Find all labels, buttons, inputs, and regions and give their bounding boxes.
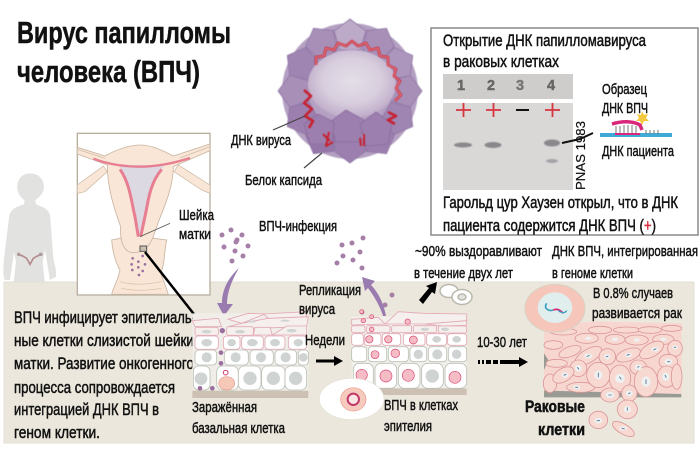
arrow: recovery — [419, 282, 437, 304]
panel: beige background — [4, 282, 694, 443]
label: 90 percent recover: в течение двух лет — [414, 266, 513, 282]
label: years with arrow — [477, 335, 528, 367]
label: cancer cells — [525, 397, 585, 439]
capsomers — [278, 19, 422, 163]
label: years with arrow: 10-30 лет — [477, 335, 527, 351]
label: cervix: матки — [179, 227, 211, 243]
label: infected basal cell: базальная клетка — [192, 421, 286, 437]
chromatin — [564, 347, 676, 429]
label: weeks with arrow: Недели — [305, 333, 345, 349]
labels: sample: Образец — [602, 82, 647, 98]
squamous cells — [352, 312, 467, 345]
label: viral DNA — [231, 116, 305, 149]
label: viral replication: Репликация — [299, 283, 361, 299]
label: 90 percent recover: ~90% выздоравливают — [415, 244, 542, 260]
labels: sample: ДНК ВПЧ — [602, 101, 648, 117]
label: weeks with arrow — [305, 333, 345, 366]
virus particles: replication — [334, 236, 394, 314]
panel: DNA discovery — [431, 28, 698, 235]
label: 90 percent recover — [414, 244, 542, 282]
ligaments — [77, 165, 210, 193]
inner core — [308, 50, 396, 118]
label: cervix — [179, 208, 215, 243]
icon: healthy cells — [440, 284, 472, 304]
label: viral replication: вируса — [299, 302, 336, 318]
panel text: ВПЧ инфицирует эпителиаль- — [14, 308, 196, 327]
cells — [543, 325, 682, 439]
gel image: 1 — [457, 78, 465, 94]
panel text — [14, 308, 196, 442]
label: integrated DNA: в геноме клетки — [552, 266, 633, 282]
heading: в раковых клетках — [443, 52, 559, 71]
arrow: replication — [362, 277, 386, 316]
uterine wall — [93, 158, 190, 167]
heading: Открытие ДНК папилломавируса — [443, 31, 646, 50]
pointer to DNA sample — [562, 133, 593, 143]
viral DNA — [304, 41, 401, 146]
bottom capsomers — [304, 110, 392, 146]
label: 0.8 percent cancer: развивается рак — [592, 306, 683, 322]
virus dots — [130, 255, 146, 276]
label: 0.8 percent cancer: В 0.8% случаев — [593, 286, 673, 302]
panel text: матки. Развитие онкогенного — [14, 354, 194, 373]
icon: female body silhouette — [3, 173, 56, 285]
label: HPV in epithelial cells — [384, 398, 459, 435]
title: человека (ВПЧ) — [17, 54, 200, 89]
panel: uterus diagram — [77, 133, 210, 295]
label: 0.8 percent cancer — [592, 286, 683, 322]
infected nuclei — [356, 310, 461, 383]
gray nuclei — [414, 328, 461, 383]
gel image: 4 — [547, 78, 555, 94]
title — [17, 15, 231, 89]
label: infected basal cell — [192, 400, 286, 437]
infected basal cell — [219, 370, 235, 390]
gel image — [443, 74, 573, 190]
label: HPV in epithelial cells: ВПЧ в клетках — [384, 398, 459, 414]
label: integrated DNA — [552, 244, 698, 282]
gel image: 3 — [516, 78, 524, 94]
arrow: infection — [217, 268, 239, 316]
cell nuclei — [562, 337, 678, 430]
label: viral replication — [299, 283, 361, 318]
tissue: HPV in epithelium — [319, 310, 467, 420]
label: capsid protein — [245, 153, 323, 189]
vertical credit: PNAS 1983 — [573, 121, 588, 190]
uterus body — [77, 144, 210, 253]
virus in tissue — [198, 328, 225, 391]
label: cervix: Шейка — [179, 208, 215, 224]
panel text: ные клетки слизистой шейки — [14, 331, 194, 350]
squamous cells — [192, 312, 308, 335]
label: cancer cells: клетки — [538, 420, 585, 439]
cervix pointer line — [140, 223, 170, 237]
nuclei — [195, 320, 308, 385]
inset: cell with integrated DNA — [525, 284, 585, 332]
label: HPV in epithelial cells: эпителия — [384, 419, 432, 435]
label: capsid protein: Белок капсида — [245, 173, 323, 189]
tissue: infected epithelium — [192, 312, 308, 398]
label: HPV infection: ВПЧ-инфекция — [259, 219, 337, 235]
panel text: интеграцией ДНК ВПЧ в — [14, 400, 159, 419]
uterine cavity — [118, 165, 165, 237]
middle rows — [195, 336, 307, 349]
virus particle — [278, 19, 422, 163]
caption: пациента содержится ДНК ВПЧ (+) — [443, 216, 656, 235]
virus particles: infection — [220, 228, 250, 264]
gel image: 2 — [487, 78, 495, 94]
vagina — [112, 238, 168, 294]
tissue: cancer cells — [543, 322, 682, 439]
heading — [443, 31, 646, 71]
labels: sample — [602, 82, 648, 117]
title: Вирус папилломы — [17, 15, 231, 50]
pointer: cervix to epithelium — [145, 252, 197, 318]
inset: HPV in cell — [319, 378, 384, 420]
label: cancer cells: Раковые — [525, 397, 585, 416]
icon: DNA hybrid — [600, 111, 672, 135]
label: infected basal cell: Заражённая — [192, 400, 257, 416]
panel text: геном клетки. — [14, 423, 100, 442]
label: patient DNA: ДНК пациента — [602, 144, 675, 160]
panel text: процесса сопровождается — [14, 378, 175, 397]
label: viral DNA: ДНК вируса — [231, 133, 292, 149]
caption — [443, 193, 678, 235]
